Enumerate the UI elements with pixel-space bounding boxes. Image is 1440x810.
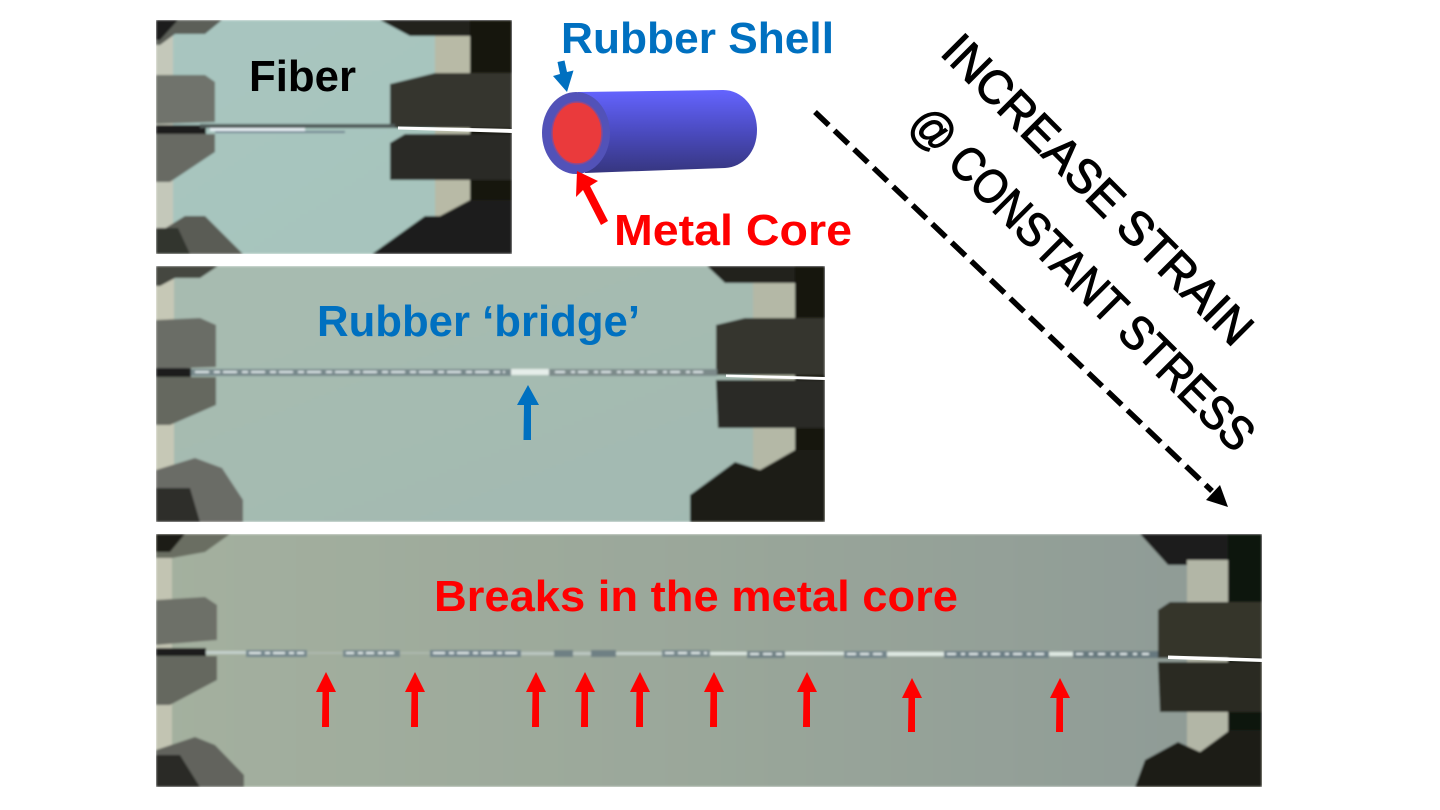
dashed arrow [815, 112, 1228, 507]
cylinder body [578, 90, 757, 173]
arrow: to metal core [576, 171, 608, 225]
rubber bridge specimen photograph [156, 266, 825, 522]
label: Breaks in the metal core: Breaks in the metal core [434, 572, 958, 621]
label: Rubber Shell: Rubber Shell [561, 14, 834, 63]
diagram: rubber shell and metal core cylinder [542, 14, 852, 255]
metal core [552, 102, 602, 164]
arrow: rubber bridge [517, 385, 539, 440]
arrow: to rubber shell [553, 60, 574, 92]
label: Metal Core: Metal Core [614, 206, 852, 255]
panel: rubber bridge photo [156, 266, 825, 522]
cylinder end cap [542, 92, 610, 174]
label: Rubber bridge: Rubber ‘bridge’ [317, 297, 640, 346]
fiber specimen photograph [156, 20, 512, 254]
panel: breaks in the metal core photo [156, 534, 1262, 787]
arrows: breaks [316, 672, 1070, 732]
annotation: increase strain at constant stress [815, 24, 1265, 507]
breaks specimen photograph [156, 534, 1262, 787]
diagonal label line 2: @ CONSTANT STRESS [899, 96, 1265, 462]
label: Fiber: Fiber [249, 52, 356, 101]
diagonal label line 1: INCREASE STRAIN [931, 24, 1263, 356]
panel: fiber photo [156, 20, 512, 254]
